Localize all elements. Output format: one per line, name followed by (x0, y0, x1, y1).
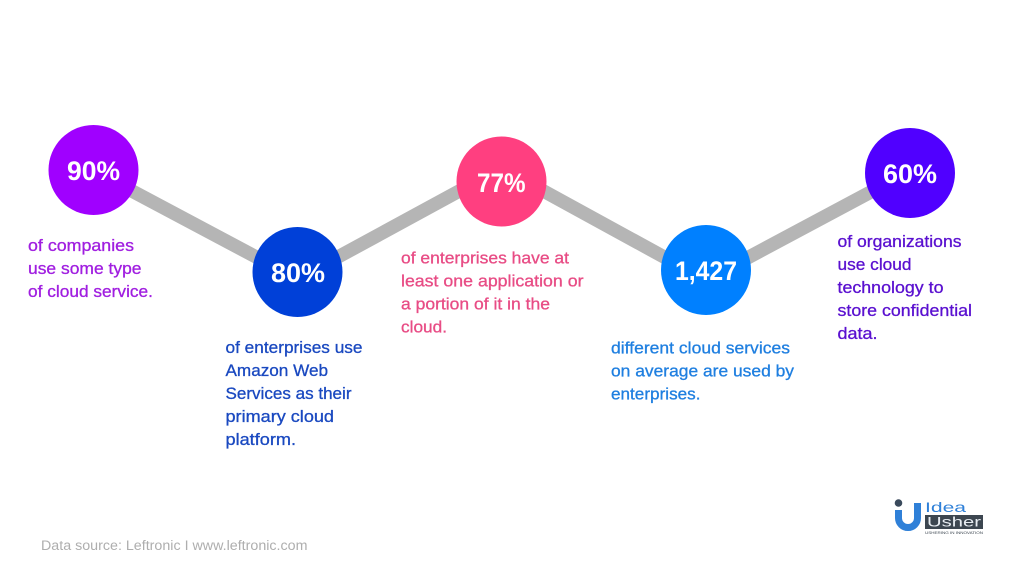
text: 90% description: of cloud service. (28, 283, 153, 301)
text: 1,427 description: enterprises. (611, 386, 700, 404)
text: 60% description: data. (838, 325, 878, 343)
logo tagline: USHERING IN INNOVATION (925, 530, 983, 535)
data source footer: Data source: Leftronic I www.leftronic.com (41, 538, 308, 553)
number: 60%: 60% (883, 159, 937, 189)
text: 60% description: technology to (838, 279, 944, 297)
text: 77% description (401, 250, 584, 336)
circle: 77% (456, 136, 546, 226)
logo word: Idea: Idea (925, 499, 966, 515)
text: 77% description: of enterprises have at (401, 250, 569, 268)
text: 1,427 description: on average are used by (611, 362, 795, 380)
circle: 80% (252, 227, 342, 317)
text: 60% description: use cloud (838, 256, 912, 274)
panel: 80% (226, 227, 362, 449)
text: 1,427 description (611, 340, 795, 404)
text: 77% description: a portion of it in the (401, 296, 550, 314)
text: 60% description (838, 233, 972, 343)
logo word: Usher: Usher (927, 514, 981, 530)
text: 80% description (226, 339, 362, 449)
text: 90% description: of companies (28, 237, 134, 255)
text: 90% description: use some type (28, 260, 142, 278)
text: 80% description: primary cloud (226, 408, 334, 426)
text: 80% description: platform. (226, 431, 296, 449)
circle: 90% (48, 125, 138, 215)
icon: logo U (898, 503, 918, 528)
number: 90%: 90% (67, 156, 120, 186)
text: 80% description: of enterprises use (226, 339, 362, 357)
panel: 90% (28, 125, 153, 301)
panel: 1,427 (611, 225, 795, 404)
circle: 60% (865, 128, 955, 218)
text: 80% description: Amazon Web (226, 362, 328, 380)
panel: 60% (838, 128, 972, 343)
text: 60% description: store confidential (838, 302, 972, 320)
icon: logo dot (895, 499, 902, 507)
logo: Idea Usher (895, 499, 983, 535)
circle: 1,427 (661, 225, 751, 315)
number: 80%: 80% (271, 258, 325, 288)
text: 77% description: least one application or (401, 272, 584, 290)
panel: 77% (401, 136, 584, 336)
number: 77%: 77% (477, 168, 526, 198)
text: 80% description: Services as their (226, 385, 352, 403)
text: 77% description: cloud. (401, 318, 447, 336)
text: 1,427 description: different cloud services (611, 340, 790, 358)
text: 90% description (28, 237, 153, 301)
text: 60% description: of organizations (838, 233, 962, 251)
number: 1,427: 1,427 (675, 256, 737, 286)
connector line (94, 168, 910, 280)
